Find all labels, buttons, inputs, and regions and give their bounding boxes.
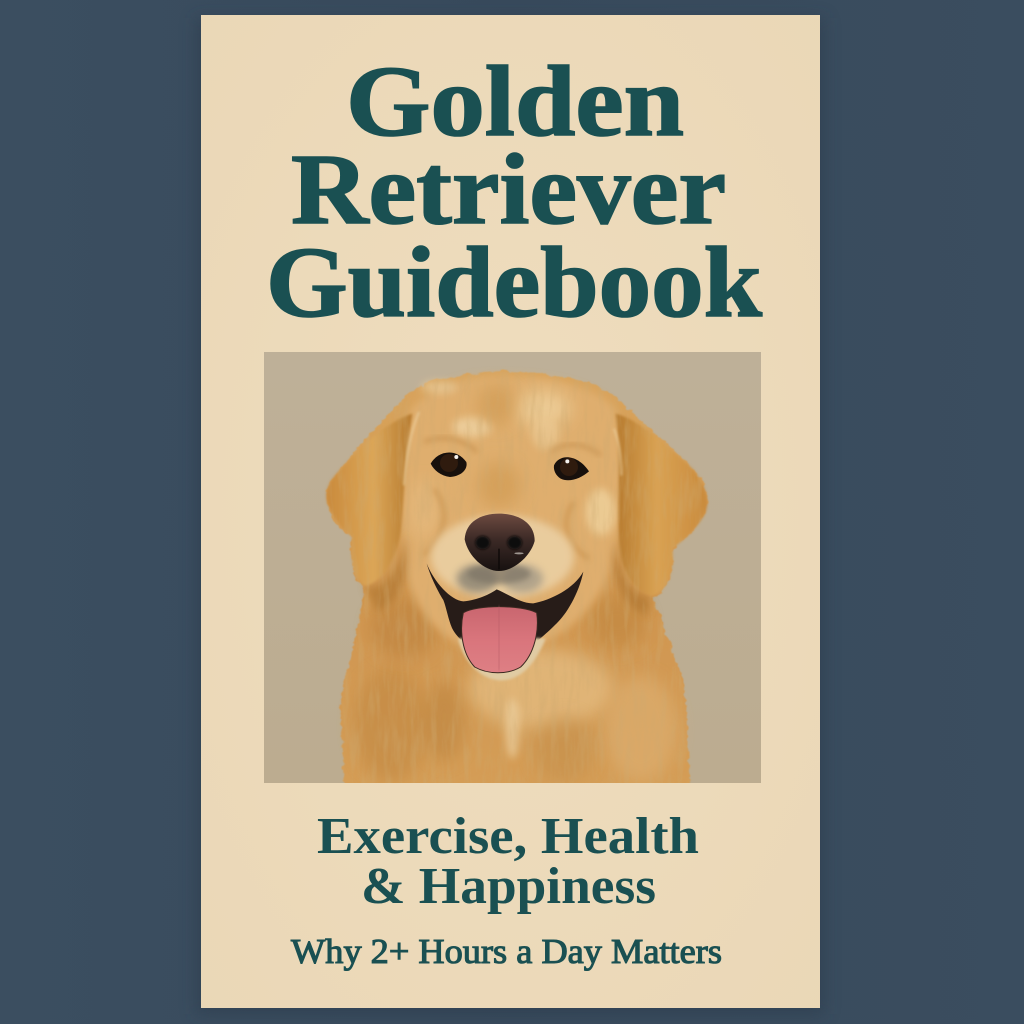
title: [266, 45, 763, 338]
panel: book cover: [201, 15, 820, 1008]
lower jaw: [458, 638, 546, 680]
muzzle: [431, 515, 574, 599]
dog silhouette: fur of head, ears and body: [326, 371, 707, 789]
subtitle: Exercise, Health: [317, 808, 699, 865]
right eye: [554, 457, 589, 480]
photo: golden retriever portrait: [264, 352, 761, 789]
subtitle: & Happiness: [361, 858, 656, 915]
fur highlights: [409, 380, 616, 559]
chest fur shading: [354, 595, 677, 782]
left ear: [326, 414, 412, 586]
subtitle: [317, 808, 699, 915]
nose: [465, 514, 535, 571]
tongue: [462, 606, 537, 673]
title: Guidebook: [266, 226, 763, 338]
ear edge highlights: [404, 412, 621, 485]
fur texture overlay: [326, 371, 707, 789]
mouth: [427, 563, 583, 643]
left eye: [431, 452, 467, 477]
title: Golden: [346, 45, 684, 157]
right ear: [616, 414, 707, 596]
title: Retriever: [291, 133, 726, 245]
book cover shadow: [196, 18, 824, 1014]
dog face fur: [401, 375, 622, 652]
shadows beneath ears: [364, 532, 651, 615]
tagline: Why 2+ Hours a Day Matters: [291, 932, 722, 971]
